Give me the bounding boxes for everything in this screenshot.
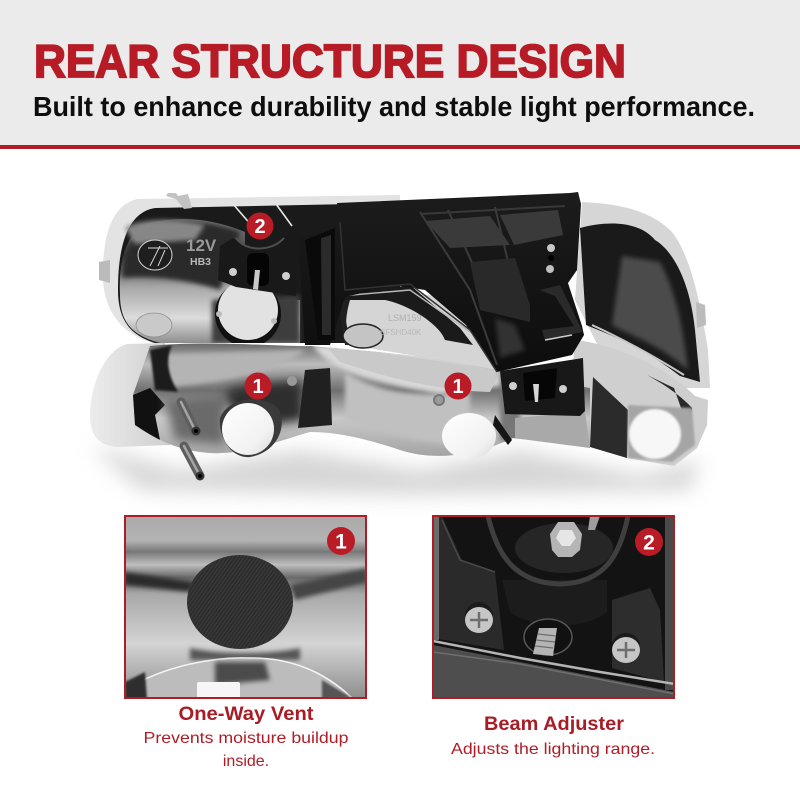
breather tubes [181,402,204,480]
moulded HB3 marking: HB3 [190,256,211,268]
badge: 2 in panel: 2 [643,532,655,554]
left screw [465,602,493,633]
lower headlight lens [90,343,170,447]
caption line: Adjusts the lighting range. [451,741,655,758]
caption: one-way vent [144,704,349,770]
moulded reflector marking: LSM159 [388,313,422,323]
adjuster torx bolt [550,522,582,557]
header band [0,0,800,149]
panel: one-way vent close-up [124,515,367,702]
panel: beam adjuster close-up [432,515,675,699]
caption heading: One-Way Vent [178,704,314,725]
badge: 1 in panel [327,527,355,555]
moulded 12V marking: 12V [186,236,217,255]
right screw [612,633,640,663]
moulded reflector marking 2: BFSHD40K [380,328,422,337]
adjuster threaded rod [524,619,572,656]
badge: 1 on headlight left [244,372,272,400]
caption heading: Beam Adjuster [484,714,625,735]
badge: 1 on headlight center [444,372,472,400]
upper right lens [575,202,710,388]
lower beam adjuster block [500,358,585,416]
title: REAR STRUCTURE DESIGN [34,35,626,87]
badge: 2 on headlight: 2 [254,216,266,238]
caption: beam adjuster [451,714,655,758]
badge: 1 on headlight center: 1 [452,376,464,398]
subtitle: Built to enhance durability and stable light performance. [33,91,755,122]
badge: 1 in panel: 1 [335,530,347,554]
upper beam adjuster block [218,228,300,296]
lower right chrome end [570,340,708,466]
adjuster cylinder [502,580,607,626]
badge: 2 in panel [635,528,663,556]
adjuster hood [515,523,613,573]
caption line 2: inside. [223,753,269,770]
upper chrome body with clear lens [99,193,400,347]
vent membrane [187,555,293,649]
black rear mounting bracket [296,192,584,372]
badge: 1 on headlight left: 1 [252,376,264,398]
lower chrome body [130,340,600,460]
headlight product photo [90,192,710,495]
upper center reflector [335,285,500,370]
badge: 2 on headlight [246,212,274,240]
ground shadow [90,445,700,495]
vent holes [287,376,445,406]
dome caps [220,399,681,459]
caption line 1: Prevents moisture buildup [144,730,349,747]
